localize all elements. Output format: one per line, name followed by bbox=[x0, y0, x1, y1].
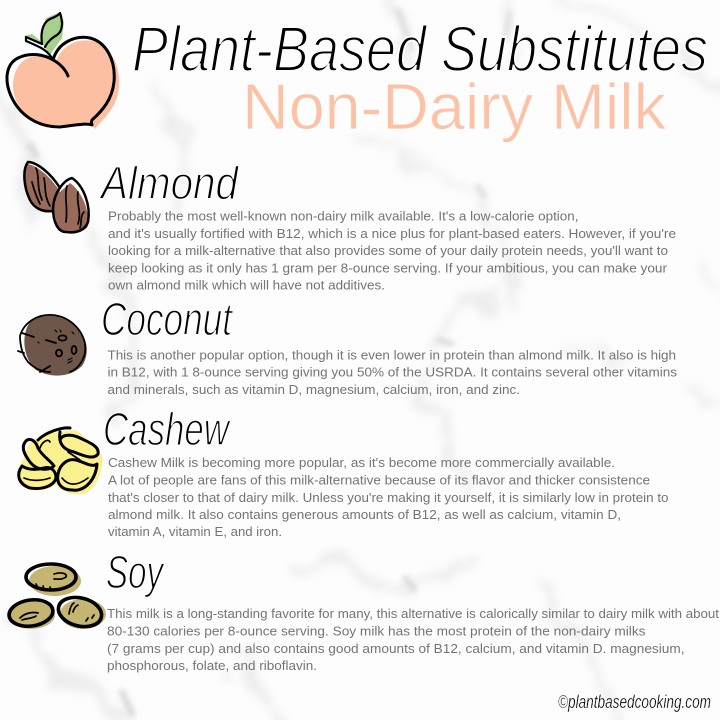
heading: Almond: Almond bbox=[98, 157, 239, 209]
text: coconut description: This is another popular option, though it is even lower in protein than almond milk. It also is high bbox=[108, 348, 676, 362]
text: cashew description: vitamin A, vitamin E, and iron. bbox=[108, 525, 282, 539]
icon: coconut bbox=[18, 315, 87, 376]
text: coconut description: in B12, with 1 8-ounce serving giving you 50% of the USRDA. It contains several other vitamins bbox=[108, 366, 677, 380]
icon: soybeans bbox=[7, 564, 106, 631]
heading: Coconut: Coconut bbox=[101, 293, 234, 345]
text: coconut description: and minerals, such as vitamin D, magnesium, calcium, iron, and zinc. bbox=[108, 383, 520, 397]
text: almond description: keep looking as it only has 1 gram per 8-ounce serving. If your ambitious, you can make your bbox=[108, 262, 667, 276]
text: almond description: own almond milk which will have not additives. bbox=[108, 278, 385, 292]
icon: cashews bbox=[19, 428, 102, 495]
text: soy description: (7 grams per cup) and also contains good amounts of B12, calcium, and vitamin D. magnesium, bbox=[107, 642, 684, 656]
section: coconut bbox=[18, 293, 677, 397]
text: almond description: Probably the most well-known non-dairy milk available. It's a low-calorie option, bbox=[108, 210, 578, 224]
peach outline bbox=[7, 37, 114, 127]
text: cashew description bbox=[108, 456, 668, 539]
heading: Soy: Soy bbox=[106, 546, 165, 598]
text: soy description bbox=[107, 607, 720, 673]
text: cashew description: Cashew Milk is becoming more popular, as it's become more commercially available. bbox=[108, 456, 615, 470]
peach leaf bbox=[24, 12, 64, 60]
subtitle: Non-Dairy Milk bbox=[242, 70, 666, 143]
section: almond bbox=[24, 157, 676, 292]
icon: almonds bbox=[24, 162, 89, 233]
text: soy description: This milk is a long-standing favorite for many, this alternative is calorically similar to dairy milk with about bbox=[107, 607, 720, 621]
text: almond description bbox=[108, 210, 676, 292]
icon: peach bbox=[7, 12, 119, 129]
text: soy description: phosphorous, folate, and riboflavin. bbox=[107, 659, 317, 673]
text: almond description: looking for a milk-alternative that also provides some of your daily protein needs, you'll want to bbox=[108, 244, 668, 258]
text: cashew description: almond milk. It also contains generous amounts of B12, as well as calcium, vitamin D, bbox=[108, 508, 621, 522]
section: soy bbox=[7, 546, 720, 673]
section: cashew bbox=[19, 403, 668, 539]
text: almond description: and it's usually fortified with B12, which is a nice plus for plant-based eaters. However, if you're bbox=[108, 227, 676, 241]
heading: Cashew: Cashew bbox=[103, 403, 231, 455]
peach body bbox=[13, 40, 119, 129]
text: cashew description: A lot of people are fans of this milk-alternative because of its flavor and thicker consistence bbox=[108, 474, 650, 488]
text: cashew description: that's closer to that of dairy milk. Unless you're making it yourself, it is similarly low in protein to bbox=[108, 491, 668, 505]
text: coconut description bbox=[108, 348, 677, 397]
text: soy description: 80-130 calories per 8-ounce serving. Soy milk has the most protein of the non-dairy milks bbox=[107, 624, 646, 638]
